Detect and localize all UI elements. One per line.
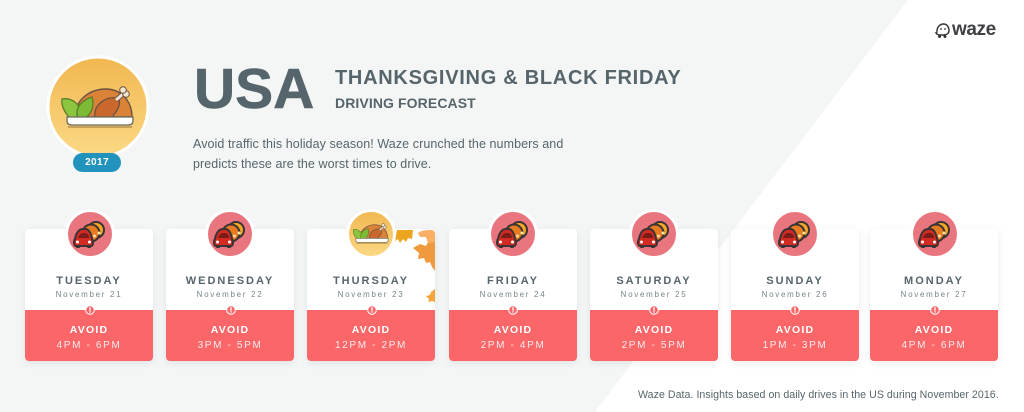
card: Saturday: AVOID — [635, 324, 673, 336]
card: Friday: FRIDAY — [487, 275, 539, 287]
card: Monday: AVOID — [915, 324, 953, 336]
icon: warning Saturday — [649, 306, 659, 315]
card: Monday: November 27 — [901, 290, 967, 299]
card: Wednesday — [166, 229, 294, 361]
icon: warning Sunday — [790, 306, 800, 315]
subheading: DRIVING FORECAST — [335, 95, 476, 111]
icon: traffic badge Tuesday — [66, 209, 114, 256]
card: Thursday: November 23 — [338, 290, 404, 299]
icon: warning Tuesday — [85, 306, 95, 315]
card: Tuesday — [25, 229, 153, 361]
card: Friday: November 24 — [480, 290, 546, 299]
card: Wednesday: 3PM - 5PM — [198, 340, 262, 351]
icon: warning Wednesday — [226, 306, 236, 315]
card: Friday — [449, 229, 577, 361]
intro text: Avoid traffic this holiday season! Waze crunched the numbers and — [193, 137, 563, 151]
card: Thursday: THURSDAY — [333, 275, 409, 287]
card: Saturday: SATURDAY — [616, 275, 692, 287]
icon: traffic badge Friday — [488, 209, 538, 256]
icon: traffic badge Saturday — [630, 209, 678, 256]
intro text: predicts these are the worst times to drive. — [193, 157, 431, 171]
icon: traffic badge Wednesday — [206, 209, 254, 256]
card: Friday: AVOID — [494, 324, 532, 336]
card: Sunday: SUNDAY — [766, 275, 824, 287]
card: Sunday: AVOID — [776, 324, 814, 336]
icon: warning Monday — [930, 306, 940, 315]
card: Tuesday: 4PM - 6PM — [57, 340, 121, 351]
card: Saturday: 2PM - 5PM — [622, 340, 686, 351]
turkey emblem with year: 2017 — [85, 157, 109, 168]
intro text — [193, 137, 563, 171]
card: Saturday — [590, 229, 718, 361]
icon: turkey badge Thursday — [346, 209, 396, 256]
card: Tuesday: TUESDAY — [56, 275, 122, 287]
card: Thursday: 12PM - 2PM — [335, 340, 407, 351]
card: Sunday: November 26 — [762, 290, 828, 299]
card: Monday — [870, 229, 998, 361]
heading: THANKSGIVING & BLACK FRIDAY — [335, 67, 682, 89]
icon: traffic badge Monday — [913, 212, 957, 256]
card: Thursday — [307, 229, 435, 361]
card: Saturday: November 25 — [621, 290, 687, 299]
turkey emblem with year — [46, 56, 150, 172]
footer source note: Waze Data. Insights based on daily drives in the US during November 2016. — [638, 389, 999, 401]
waze logo: waze — [952, 19, 996, 40]
card: Wednesday: WEDNESDAY — [186, 275, 274, 287]
card: Sunday: 1PM - 3PM — [763, 340, 827, 351]
card: Thursday: AVOID — [352, 324, 390, 336]
card: Tuesday: AVOID — [70, 324, 108, 336]
card: Sunday — [731, 229, 859, 361]
card: Tuesday: November 21 — [56, 290, 122, 299]
card: Wednesday: November 22 — [197, 290, 263, 299]
card: Monday: 4PM - 6PM — [902, 340, 966, 351]
card: Friday: 2PM - 4PM — [481, 340, 545, 351]
icon: warning Friday — [508, 306, 518, 315]
title USA: USA — [194, 57, 314, 121]
icon: traffic badge Sunday — [773, 212, 817, 256]
icon: warning Thursday — [367, 306, 377, 315]
card: Wednesday: AVOID — [211, 324, 249, 336]
card: Monday: MONDAY — [904, 275, 964, 287]
